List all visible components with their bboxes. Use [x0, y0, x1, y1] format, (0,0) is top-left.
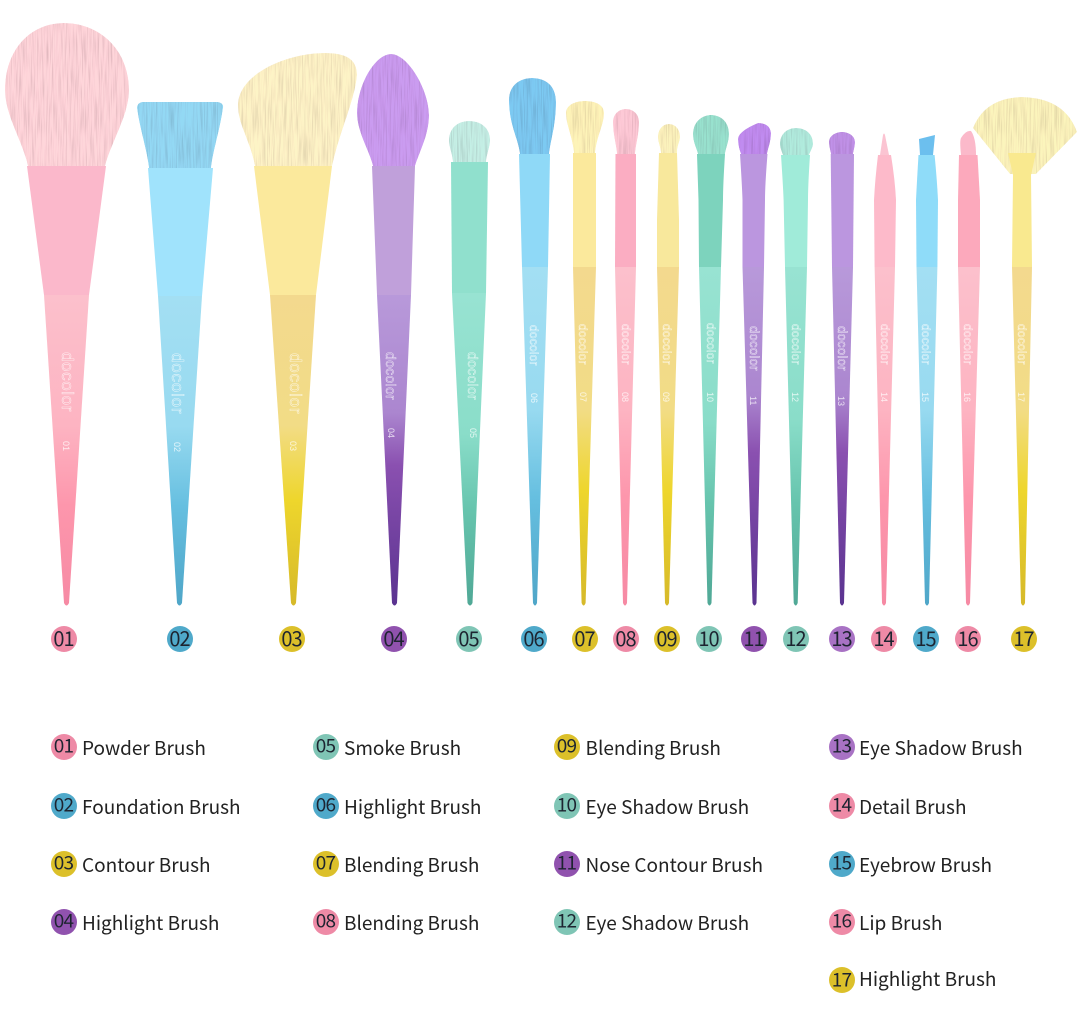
logo 12: docolor [789, 324, 803, 365]
handle number 01: 01 [61, 441, 71, 451]
legend 05: Smoke Brush [344, 734, 461, 761]
brush 17 fan [973, 97, 1077, 606]
brush 10 eye shadow [693, 115, 729, 606]
handle 03 [270, 295, 316, 606]
handle number 14: 14 [879, 392, 889, 402]
brush 06 highlight [509, 78, 556, 606]
legend 06: Highlight Brush [344, 793, 481, 820]
logo 13: docolor [835, 326, 850, 371]
logo 04: docolor [383, 352, 399, 400]
legend 06: 06 [316, 790, 335, 818]
handle 13 [832, 267, 853, 606]
ferrule 15 [916, 155, 938, 267]
legend 04: 04 [54, 906, 73, 934]
ferrule 09 [657, 153, 679, 267]
brush 15 eyebrow [916, 135, 938, 606]
number badges row [51, 623, 1037, 652]
legend 02: 02 [54, 790, 73, 818]
badge 09: 09 [656, 623, 677, 652]
handle 15 [916, 267, 937, 606]
handle number 15: 15 [920, 392, 930, 402]
handle number 17: 17 [1016, 392, 1026, 402]
legend 08: Blending Brush [344, 909, 479, 936]
bristles 17 [973, 97, 1077, 174]
legend 01: 01 [54, 732, 73, 758]
legend 08: 08 [316, 906, 335, 934]
badge 17: 17 [1013, 623, 1034, 652]
brush 03 contour [238, 53, 357, 606]
brush 09 blending [657, 124, 680, 606]
legend 10: 10 [557, 790, 576, 818]
brush 11 nose contour [738, 123, 771, 606]
handle number 07: 07 [578, 392, 588, 402]
handle number 16: 16 [962, 392, 972, 402]
brush 12 eye shadow [780, 128, 813, 606]
badge 06: 06 [523, 623, 544, 652]
bristles 06 [509, 78, 556, 154]
legend 15: Eyebrow Brush [859, 851, 992, 878]
legend 17: Highlight Brush [859, 965, 996, 992]
legend 12: Eye Shadow Brush [586, 909, 749, 936]
handle 06 [522, 267, 548, 606]
handle number 13: 13 [836, 396, 846, 406]
legend 16: Lip Brush [859, 909, 942, 936]
bristles 02 [137, 102, 223, 168]
bristles 04 [357, 54, 429, 166]
ferrule 01 [27, 166, 106, 295]
logo 10: docolor [704, 323, 718, 364]
logo 09: docolor [660, 324, 674, 365]
legend 11: 11 [557, 848, 576, 876]
handle 14 [875, 267, 895, 606]
ferrule 03 [254, 166, 332, 295]
brush 01 powder [5, 23, 129, 606]
ferrule 08 [615, 154, 636, 267]
badge 14: 14 [873, 623, 894, 652]
brush 02 foundation [137, 102, 223, 606]
badge 02: 02 [169, 623, 190, 652]
badge 13: 13 [831, 623, 852, 652]
badge 10: 10 [698, 623, 719, 652]
legend 04: Highlight Brush [82, 909, 219, 936]
ferrule 10 [697, 154, 725, 267]
legend 03: Contour Brush [82, 851, 211, 878]
logo 11: docolor [747, 326, 762, 371]
badge 15: 15 [915, 623, 936, 652]
bristles 15 [919, 135, 935, 155]
handle 02 [158, 296, 202, 606]
legend [51, 732, 1023, 993]
bristles 08 [613, 109, 639, 154]
badge 01: 01 [53, 623, 74, 652]
logo 17: docolor [1015, 324, 1029, 365]
brush 07 blending [566, 101, 604, 606]
legend 09: Blending Brush [586, 734, 721, 761]
ferrule 05 [451, 162, 488, 293]
logo 05: docolor [465, 352, 481, 400]
handle 17 [1012, 267, 1032, 606]
handle 11 [742, 267, 764, 606]
handle number 11: 11 [748, 396, 758, 405]
ferrule 02 [148, 168, 213, 296]
bristles 03 [238, 53, 357, 166]
handle number 10: 10 [705, 392, 715, 402]
handle number 02: 02 [172, 442, 182, 452]
legend 07: Blending Brush [344, 851, 479, 878]
badge 05: 05 [458, 623, 479, 652]
logo 14: docolor [878, 324, 892, 365]
badge 03: 03 [281, 623, 302, 652]
legend 07: 07 [316, 848, 335, 876]
bristles 11 [738, 123, 771, 154]
legend 14: Detail Brush [859, 793, 966, 820]
bristles 05 [449, 121, 490, 162]
logo 02: docolor [168, 353, 187, 414]
handle 01 [44, 295, 89, 606]
badge 07: 07 [574, 623, 595, 652]
badge 12: 12 [785, 623, 806, 652]
legend 16 [829, 906, 942, 936]
logo 15: docolor [919, 324, 933, 365]
badge 16: 16 [957, 623, 978, 652]
bristles 01 [5, 23, 129, 166]
logo 07: docolor [576, 324, 590, 365]
legend 13: Eye Shadow Brush [859, 734, 1023, 761]
logo 01: docolor [58, 352, 77, 412]
ferrule 13 [831, 154, 854, 267]
ferrule 11 [740, 154, 768, 267]
legend 02: Foundation Brush [82, 793, 241, 820]
handle 08 [615, 267, 636, 606]
handle 10 [699, 267, 721, 606]
ferrule 07 [573, 153, 596, 267]
bristles 14 [880, 134, 889, 155]
handle number 08: 08 [620, 392, 630, 402]
legend 17: 17 [832, 966, 851, 992]
bristles 07 [566, 101, 604, 153]
brush 08 blending [613, 109, 639, 606]
logo 08: docolor [619, 324, 633, 365]
legend 09: 09 [557, 732, 576, 758]
legend 11: Nose Contour Brush [586, 851, 763, 878]
brush 13 eye shadow [829, 132, 855, 606]
badge 11: 11 [743, 623, 764, 652]
legend 14: 14 [832, 790, 851, 818]
handle number 06: 06 [529, 393, 539, 403]
logo 03: docolor [286, 353, 305, 414]
handle 04 [377, 295, 411, 606]
logo 06: docolor [527, 325, 541, 366]
bristles 16 [960, 131, 976, 155]
handle number 04: 04 [386, 428, 396, 438]
legend 16: 16 [832, 906, 851, 934]
bristles 12 [780, 128, 813, 155]
handle 07 [573, 267, 596, 606]
handle 16 [958, 267, 980, 606]
legend 15: 15 [832, 848, 851, 876]
ferrule 17 [1008, 153, 1036, 267]
ferrule 06 [519, 154, 550, 267]
handle 09 [657, 267, 679, 606]
legend 01: Powder Brush [82, 734, 206, 761]
handle number 12: 12 [790, 392, 800, 402]
logo 16: docolor [961, 324, 975, 365]
handle 05 [452, 293, 486, 606]
badge 08: 08 [615, 623, 636, 652]
bristles 13 [829, 132, 855, 154]
legend 10: Eye Shadow Brush [586, 793, 749, 820]
ferrule 04 [372, 166, 415, 295]
ferrule 12 [781, 155, 810, 267]
brush 16 lip [958, 131, 980, 606]
bristles 10 [693, 115, 729, 154]
legend 12: 12 [557, 906, 576, 934]
brush 05 smoke [449, 121, 490, 606]
ferrule 16 [958, 155, 980, 267]
handle number 09: 09 [661, 392, 671, 402]
brush 14 detail [874, 134, 896, 606]
brush 04 highlight [357, 54, 429, 606]
handle 12 [785, 267, 807, 606]
ferrule 14 [874, 155, 896, 267]
legend 03: 03 [54, 848, 73, 876]
legend 13: 13 [832, 732, 851, 758]
bristles 09 [658, 124, 680, 153]
legend 05: 05 [316, 732, 335, 758]
handle number 03: 03 [288, 441, 298, 451]
handle number 05: 05 [468, 428, 478, 438]
badge 04: 04 [383, 623, 404, 652]
